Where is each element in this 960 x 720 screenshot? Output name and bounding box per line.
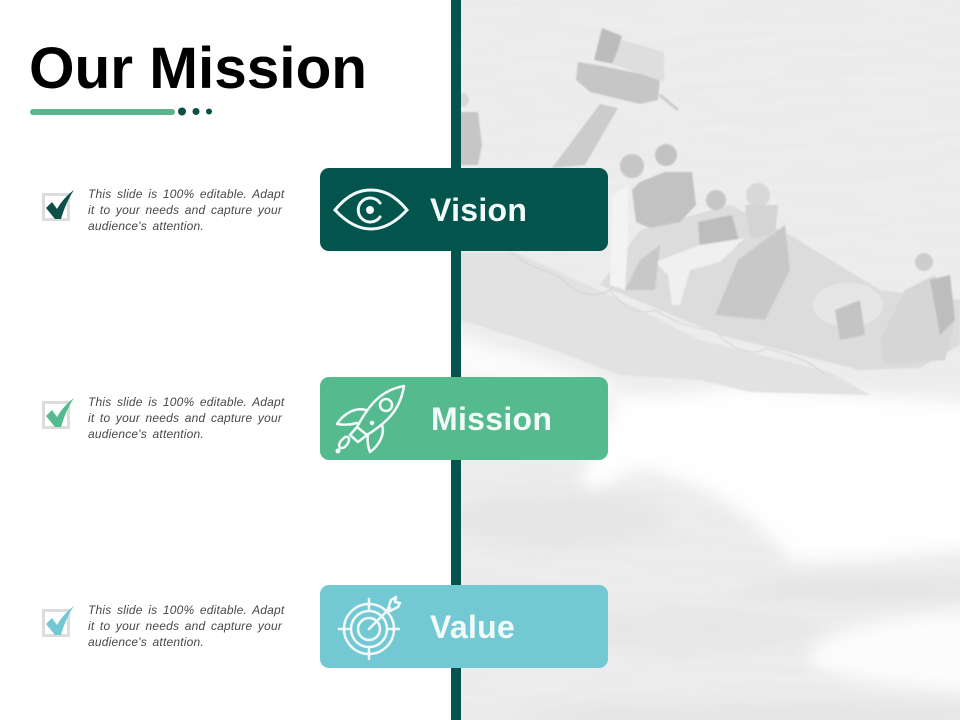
text block: value (88, 603, 285, 649)
text block: mission: audience's attention. (88, 427, 204, 441)
card: mission: Mission (431, 401, 552, 437)
background photo: boat at sea (461, 0, 960, 720)
title: Our Mission (29, 36, 367, 101)
checkbox: vision (42, 190, 74, 221)
checkbox: value (42, 606, 74, 637)
title underline with dots (30, 108, 212, 116)
text block: vision: audience's attention. (88, 219, 204, 233)
text block: vision: This slide is 100% editable. Adapt (88, 187, 284, 201)
icon: rocket (336, 384, 406, 454)
card: value: Value (430, 609, 515, 645)
text block: value: audience's attention. (88, 635, 204, 649)
text block: vision (88, 187, 285, 233)
crew (620, 154, 644, 178)
text block: value: it to your needs and capture your (88, 619, 282, 633)
hull (460, 252, 870, 395)
checkbox: mission (42, 398, 74, 429)
text block: value: This slide is 100% editable. Adapt (88, 603, 284, 617)
vertical divider bar (451, 0, 461, 720)
text block: mission: it to your needs and capture your (88, 411, 282, 425)
text block: mission: This slide is 100% editable. Adapt (88, 395, 284, 409)
icon: target with arrow (338, 596, 402, 660)
card: mission (320, 377, 608, 460)
text block: mission (88, 395, 285, 441)
icon: eye (333, 188, 409, 230)
text block: vision: it to your needs and capture your (88, 203, 282, 217)
card: value (320, 585, 608, 668)
gun mount (594, 28, 622, 64)
card: vision (320, 168, 608, 251)
card: vision: Vision (430, 192, 527, 228)
